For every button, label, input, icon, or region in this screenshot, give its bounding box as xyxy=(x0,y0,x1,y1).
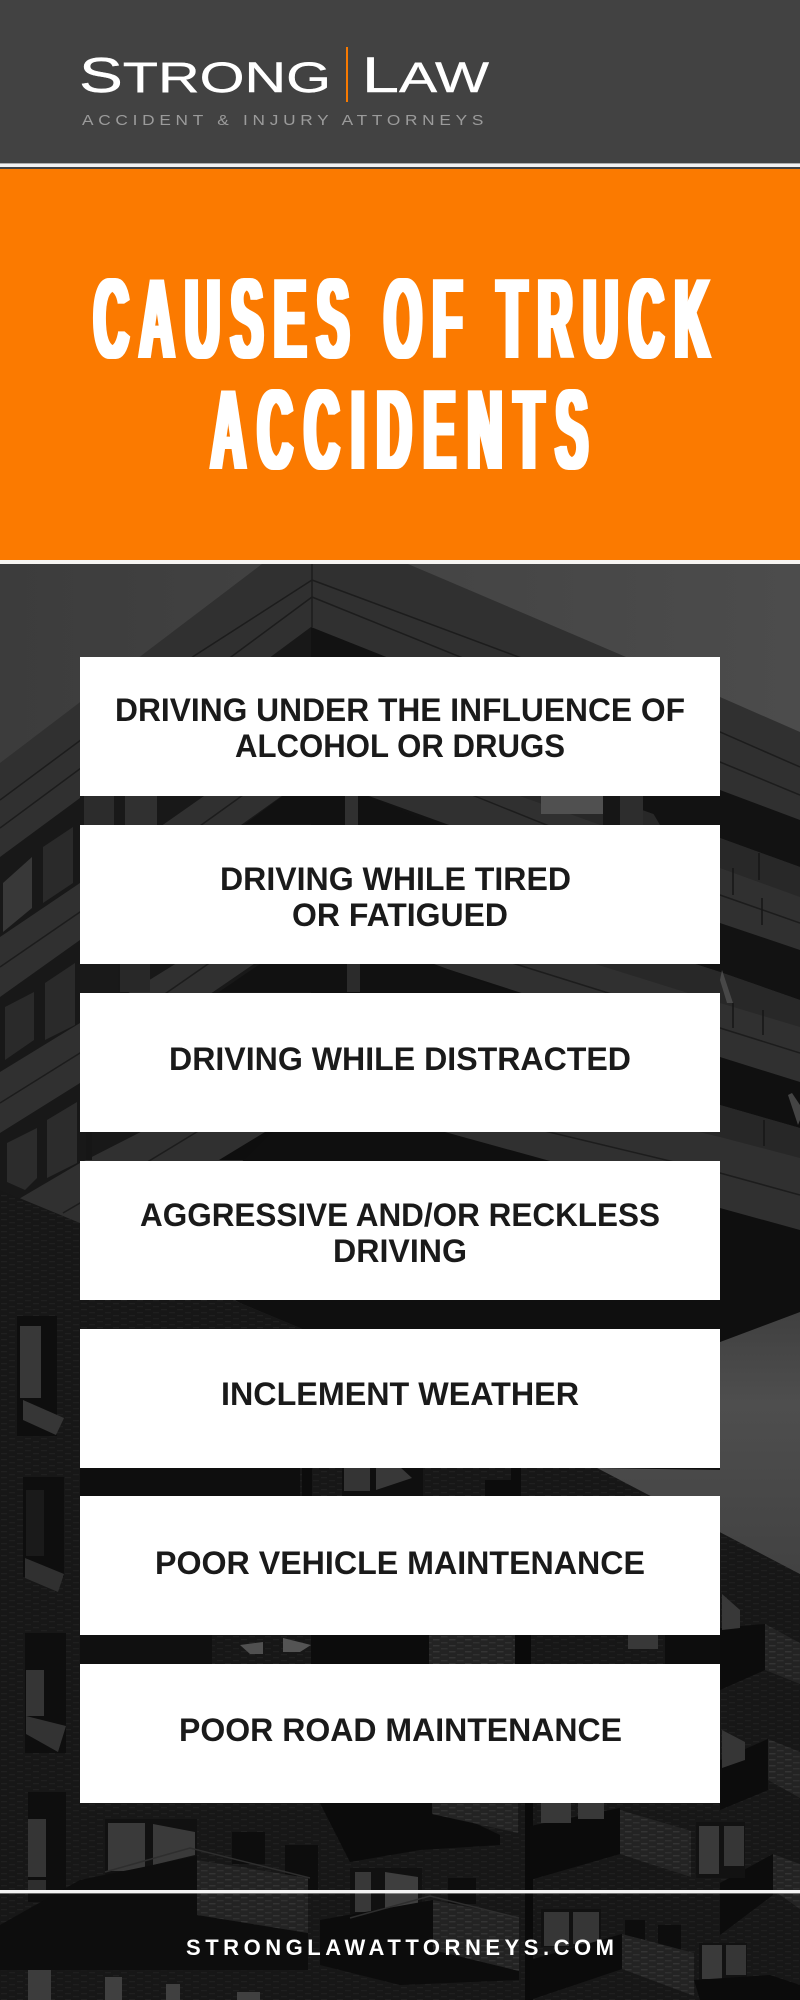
lower dark soffit xyxy=(150,1095,800,1470)
panel: cause 4: DRIVING xyxy=(333,1233,467,1269)
gap details behind the cards xyxy=(80,775,720,1160)
logo wordmark: Strong: S TRONG xyxy=(79,49,331,103)
title: ACCIDENTS xyxy=(211,366,588,494)
panel: cause 3 xyxy=(80,993,720,1132)
panel: cause 2 xyxy=(80,825,720,964)
panel: cause 6 xyxy=(80,1496,720,1635)
logo: Strong Law xyxy=(79,47,490,129)
title xyxy=(94,255,709,494)
panel: orange title banner xyxy=(0,169,800,560)
background: header band xyxy=(0,0,800,169)
footer divider line xyxy=(0,1890,800,1893)
panel: cause 1: DRIVING UNDER THE INFLUENCE OF xyxy=(115,692,685,728)
panel: cause 4 xyxy=(80,1161,720,1300)
left wing window floors xyxy=(0,627,311,1210)
logo wordmark: Law: LAW xyxy=(362,47,490,103)
header divider line xyxy=(0,163,800,167)
brick building left windows xyxy=(17,1316,66,2000)
title divider line xyxy=(0,560,800,564)
panel: cause 2: DRIVING WHILE TIRED xyxy=(220,861,571,897)
background: building photograph xyxy=(0,564,800,2000)
panel: cause 4: AGGRESSIVE AND/OR RECKLESS xyxy=(140,1197,660,1233)
logo tagline: ACCIDENT & INJURY ATTORNEYS xyxy=(82,112,484,129)
panel: cause 3: DRIVING WHILE DISTRACTED xyxy=(169,1041,631,1077)
footer website address: STRONGLAWATTORNEYS.COM xyxy=(186,1935,614,1960)
title: CAUSES OF TRUCK xyxy=(94,255,709,383)
logo divider xyxy=(346,47,348,102)
panel: cause 2: OR FATIGUED xyxy=(292,897,508,933)
panel: cause 5: INCLEMENT WEATHER xyxy=(221,1376,579,1412)
panel: cause 7: POOR ROAD MAINTENANCE xyxy=(179,1712,622,1748)
panel: cause 5 xyxy=(80,1329,720,1468)
balconies and windows xyxy=(0,1467,800,2000)
panel: cause 1 xyxy=(80,657,720,796)
balcony row near footer xyxy=(320,1803,500,1862)
panel: cause 6: POOR VEHICLE MAINTENANCE xyxy=(155,1545,645,1581)
brick building xyxy=(0,1190,800,2000)
panel: cause 1: ALCOHOL OR DRUGS xyxy=(235,728,565,764)
right wing soffits and glass xyxy=(311,627,800,1158)
panel: cause 7 xyxy=(80,1664,720,1803)
